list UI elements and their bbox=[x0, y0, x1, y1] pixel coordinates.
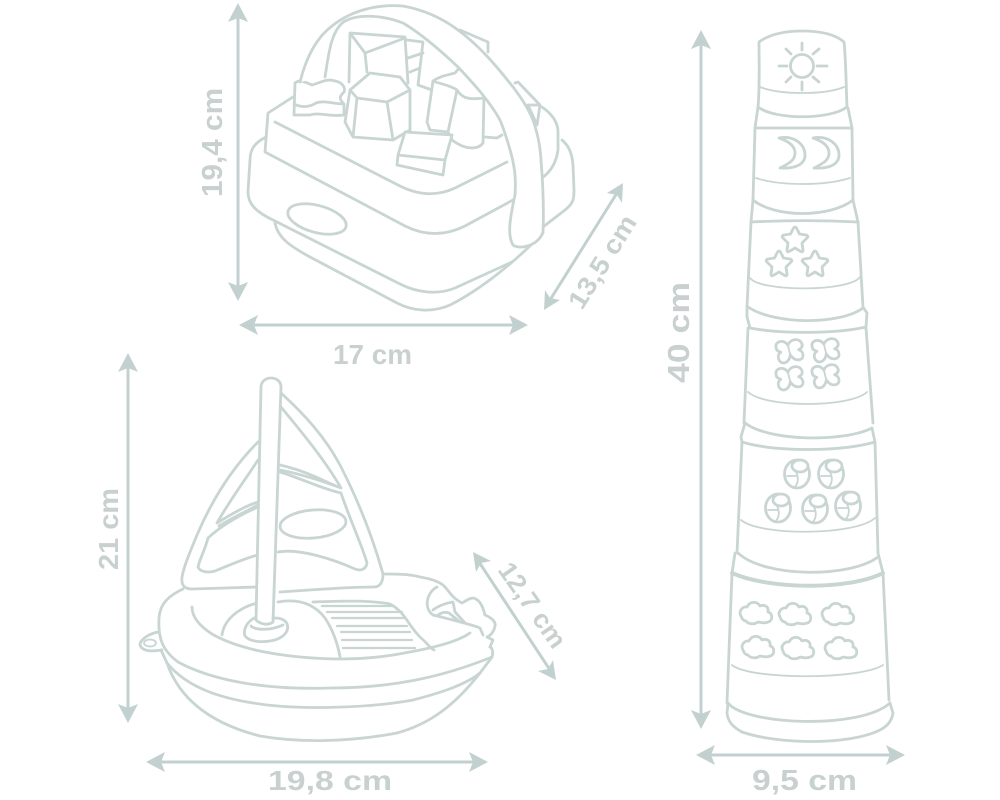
dimension: boat width 19,8 cm: 19,8 cm bbox=[268, 765, 392, 796]
hexagon block bbox=[345, 73, 410, 140]
dimension: boat depth 12,7 cm bbox=[473, 552, 573, 680]
basket oval hole bbox=[285, 198, 349, 240]
cup 6: clouds bbox=[727, 573, 893, 742]
dimension: basket width 17 cm: 17 cm bbox=[333, 339, 412, 370]
bow loop hole bbox=[144, 640, 156, 646]
cup 2: moons bbox=[751, 128, 858, 222]
cup 1: sun bbox=[755, 31, 852, 128]
star icons bbox=[766, 227, 828, 276]
sun icon bbox=[779, 43, 827, 90]
fish block bbox=[294, 80, 345, 115]
dimension: basket width 17 cm bbox=[239, 315, 528, 370]
back blocks bbox=[407, 30, 488, 130]
toy: sailboat bbox=[140, 378, 495, 741]
square block bbox=[397, 132, 452, 175]
cup 5: beetles bbox=[732, 442, 883, 573]
dimension: basket height 19,4 cm: 19,4 cm bbox=[197, 88, 229, 197]
hull bbox=[159, 574, 495, 741]
dimension: boat depth 12,7 cm: 12,7 cm bbox=[492, 556, 573, 654]
basket lower body bbox=[248, 107, 574, 310]
sail bbox=[182, 393, 383, 592]
dimension: tower width 9,5 cm: 9,5 cm bbox=[752, 765, 857, 797]
moon icons bbox=[779, 137, 839, 168]
butterfly icons bbox=[775, 338, 840, 391]
dimension: boat height 21 cm: 21 cm bbox=[93, 488, 124, 570]
beetle icons bbox=[766, 460, 860, 523]
dimension: tower height 40 cm: 40 cm bbox=[661, 282, 696, 383]
dimension: boat height 21 cm bbox=[93, 353, 138, 723]
pentagon block bbox=[349, 33, 408, 83]
mast base bbox=[244, 617, 288, 642]
dimension: basket depth 13,5 cm: 13,5 cm bbox=[562, 209, 643, 314]
cup 3: stars bbox=[747, 222, 867, 332]
dimension: basket height 19,4 cm bbox=[197, 3, 248, 301]
sail oval bbox=[279, 507, 347, 541]
cup 4: butterflies bbox=[741, 328, 875, 450]
basket lid bbox=[265, 97, 513, 234]
toy: shape sorter basket bbox=[248, 6, 574, 310]
left cylinder block bbox=[427, 67, 484, 148]
dimension: tower height 40 cm bbox=[661, 30, 711, 729]
rudder bbox=[427, 587, 483, 635]
cloud icons bbox=[740, 602, 857, 659]
dimension: tower width 9,5 cm bbox=[696, 745, 905, 797]
basket handle bbox=[300, 6, 543, 247]
mast bbox=[256, 378, 281, 624]
bow loop bbox=[140, 632, 162, 651]
right peg bbox=[515, 82, 540, 125]
dimension: boat width 19,8 cm bbox=[146, 752, 488, 796]
dimension: basket depth 13,5 cm bbox=[544, 183, 643, 314]
toy: stacking cups tower bbox=[727, 31, 893, 742]
cabin bbox=[222, 601, 434, 657]
